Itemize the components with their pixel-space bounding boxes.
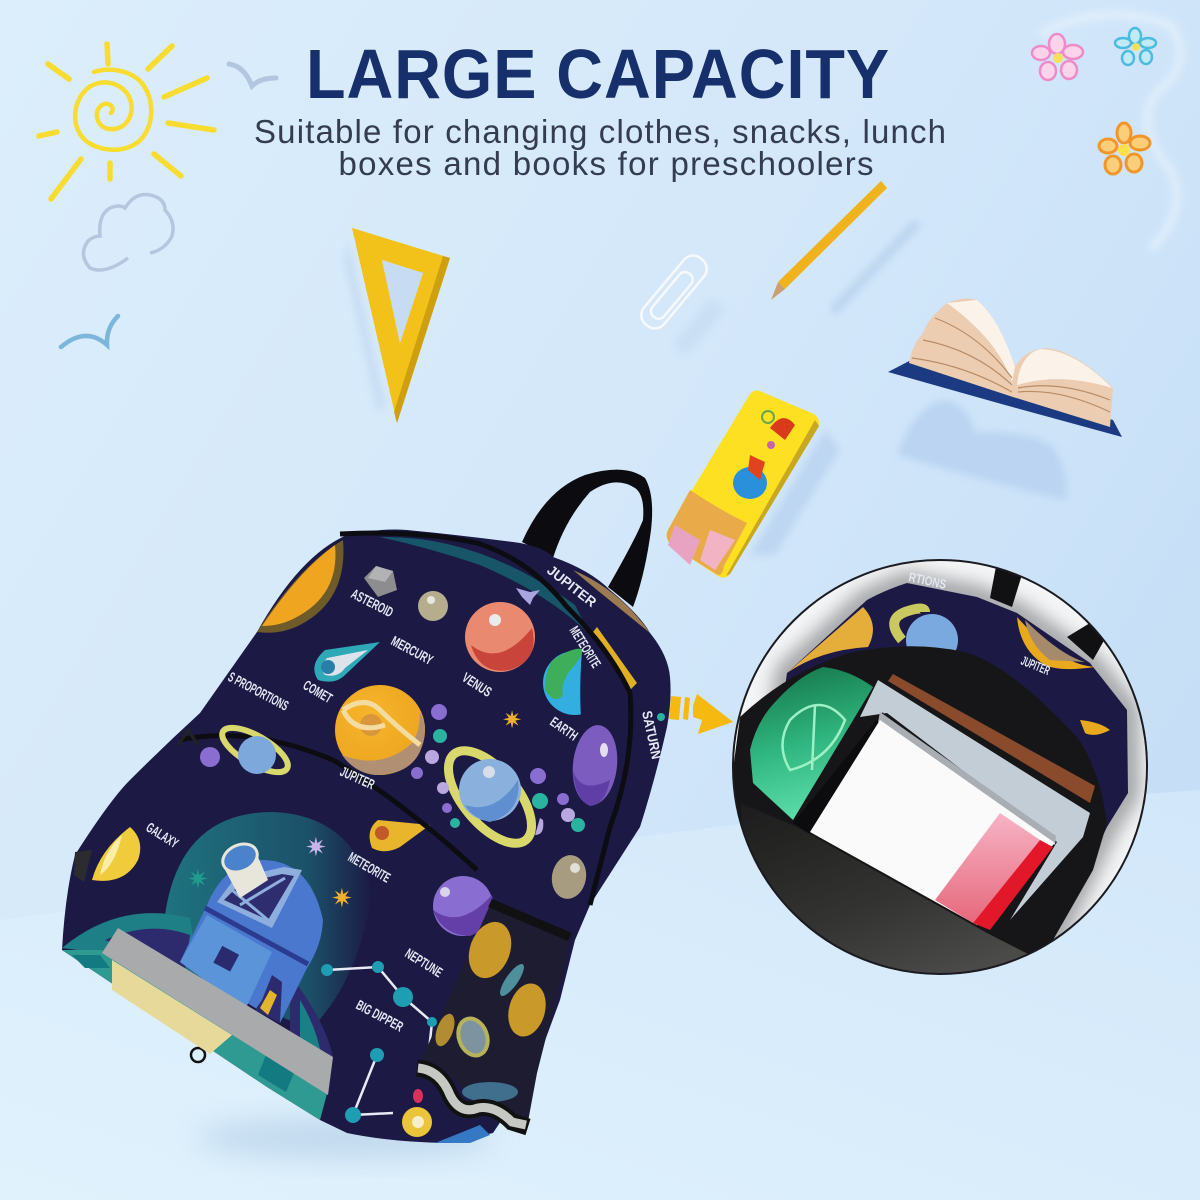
backpack — [62, 470, 671, 1143]
labels: EARTH — [547, 713, 581, 744]
dome glow — [160, 812, 372, 1030]
backpack fabric — [760, 583, 1128, 940]
pouch lines — [782, 705, 845, 770]
inset labels — [907, 569, 1053, 678]
small gold shape — [1080, 720, 1110, 735]
venus — [465, 602, 535, 672]
meteor — [370, 820, 430, 851]
asteroid — [364, 566, 397, 597]
side mesh pocket — [417, 903, 570, 1127]
mesh binding light — [418, 1068, 526, 1125]
dark teal stripes — [72, 955, 296, 1092]
D-ring — [191, 1048, 205, 1062]
gold streak — [593, 627, 637, 690]
title: LARGE CAPACITY — [306, 35, 890, 113]
bottom galaxy — [402, 1089, 432, 1137]
inset labels: JUPITER — [1019, 653, 1053, 678]
lower beige planet — [548, 852, 590, 902]
icon: paper clip — [636, 251, 712, 333]
opening interior — [734, 646, 1107, 954]
icon: triangle ruler — [352, 228, 450, 423]
stars: ✷ — [305, 832, 327, 862]
shadow: pencil case — [750, 430, 840, 555]
labels: METEORITE — [566, 623, 604, 671]
notebook face — [810, 720, 1055, 925]
fabric shadow halo — [760, 583, 1128, 940]
main zipper — [340, 533, 631, 905]
zipper puller — [178, 728, 198, 745]
crescent — [1017, 617, 1095, 669]
lining star — [516, 588, 540, 605]
red stripe — [973, 840, 1053, 930]
magnified inset circle — [730, 556, 1147, 990]
handle left — [990, 568, 1021, 607]
small ringed planet — [216, 719, 294, 781]
handle — [522, 470, 652, 607]
pink stripe — [935, 813, 1040, 923]
icon: cloud — [83, 195, 173, 270]
teal lining — [380, 537, 590, 635]
main body — [62, 530, 671, 1143]
labels: S PROPORTIONS — [226, 669, 291, 714]
notebook band — [793, 712, 888, 834]
labels: COMET — [300, 677, 336, 706]
labels: GALAXY — [143, 819, 182, 851]
purple planet — [569, 723, 621, 807]
ground arcs — [62, 913, 333, 1095]
shadow: pencil — [832, 222, 918, 312]
green pouch — [750, 667, 873, 820]
orange star: ✷ — [502, 707, 522, 734]
subtitle: boxes and books for preschoolers — [338, 145, 874, 182]
labels: NEPTUNE — [402, 945, 446, 980]
notebook pages edge — [878, 712, 1056, 845]
labels: VENUS — [459, 669, 495, 700]
stars — [187, 832, 353, 913]
labels: ASTEROID — [349, 585, 396, 620]
labels: METEORITE — [346, 849, 393, 886]
mesh binding — [417, 1068, 528, 1127]
planet ring — [894, 608, 925, 640]
front pocket zipper — [180, 736, 477, 870]
labels: SATURN — [639, 709, 665, 761]
band under reflector — [62, 950, 328, 1120]
galaxy — [92, 827, 140, 881]
subtitle — [254, 113, 946, 182]
observatory — [180, 839, 323, 1023]
comet — [314, 642, 380, 682]
labels: JUPITER — [544, 562, 600, 610]
shadow under backpack — [195, 1118, 495, 1158]
big sun — [257, 540, 343, 633]
lower purple planet — [433, 876, 493, 936]
icon: open book — [888, 299, 1122, 437]
handle right — [1067, 623, 1106, 660]
shadow: triangle ruler — [344, 240, 385, 412]
stars: ✷ — [187, 864, 209, 894]
arrow — [669, 694, 733, 734]
icon: bird left — [61, 316, 118, 347]
icon: pencil case — [667, 390, 819, 578]
constellation — [321, 961, 437, 1123]
bottom blue shape — [435, 1125, 490, 1143]
ringed planet — [433, 737, 547, 857]
left strap — [74, 850, 92, 882]
decoration: smoke swirl — [1040, 15, 1180, 250]
dots — [200, 704, 665, 835]
icon: pencil — [771, 181, 887, 300]
gold planet — [787, 607, 873, 673]
icon: flowers — [1032, 28, 1156, 174]
shadow: paper clip — [672, 297, 726, 357]
labels: BIG DIPPER — [354, 997, 406, 1035]
inset labels: RTIONS — [907, 569, 948, 592]
labels — [143, 562, 665, 1035]
labels: MERCURY — [389, 633, 436, 668]
floor — [0, 790, 1200, 1200]
eye planet — [335, 685, 425, 775]
brown book edge — [888, 674, 1095, 803]
reflector strip — [102, 928, 333, 1095]
marbled book — [860, 680, 1090, 920]
subtitle: Suitable for changing clothes, snacks, lunch — [254, 113, 946, 150]
top right brown planet — [573, 570, 650, 633]
cream planet — [112, 960, 232, 1054]
labels: JUPITER — [338, 763, 377, 792]
stars: ✷ — [331, 883, 353, 913]
earth — [543, 648, 582, 715]
mercury — [418, 591, 448, 621]
blue planet — [906, 614, 958, 650]
icon: small bird top — [229, 64, 276, 86]
shadow: book — [897, 400, 1067, 500]
lower interior — [742, 811, 1027, 973]
icon: sun — [39, 44, 214, 199]
